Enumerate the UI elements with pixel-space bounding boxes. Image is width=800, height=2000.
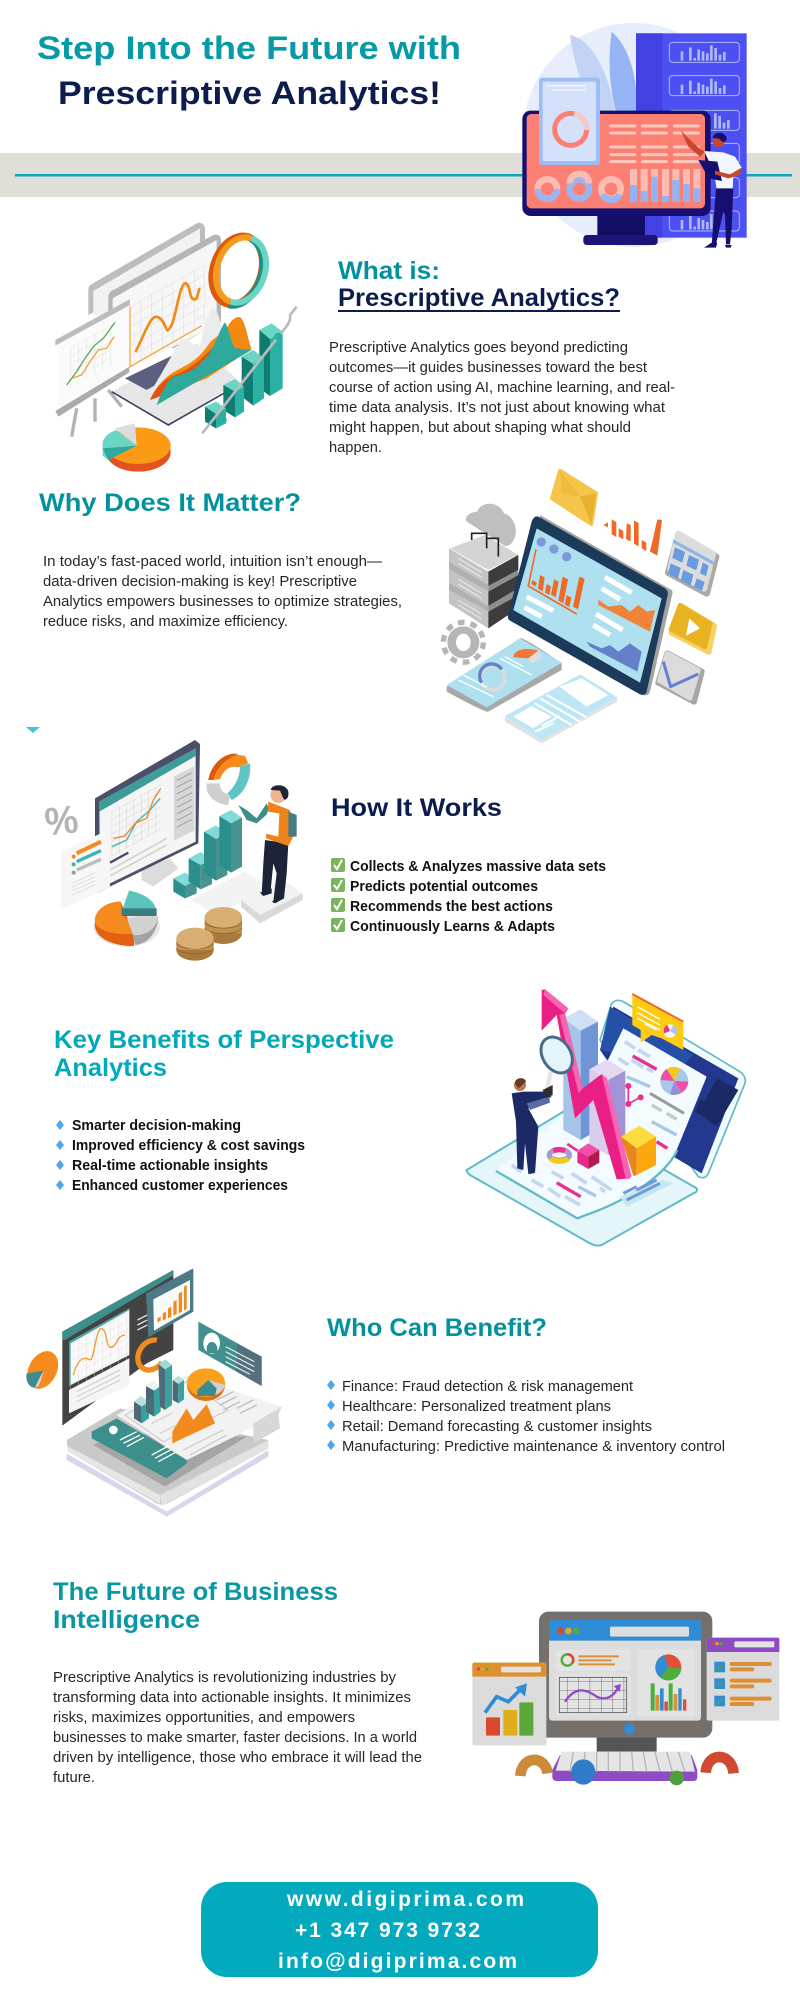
server stack xyxy=(449,535,518,628)
monitor xyxy=(539,1612,712,1738)
text block: definition: Prescriptive Analytics goes beyond predicting xyxy=(329,339,628,356)
text block: definition: outcomes—it guides businesses toward the best xyxy=(329,359,648,376)
stand xyxy=(597,1735,657,1752)
checklist: how it works: Recommends the best actions xyxy=(350,898,553,915)
checklist: how it works: Predicts potential outcomes xyxy=(350,878,538,895)
list: who can benefit: Retail: Demand forecasting & customer insights xyxy=(342,1418,652,1435)
text block: future: Prescriptive Analytics is revolutionizing industries by xyxy=(53,1669,396,1686)
heading: why does it matter: Why Does It Matter? xyxy=(39,489,301,517)
document card xyxy=(505,674,617,743)
cloud xyxy=(466,504,516,546)
contact box: +1 347 973 9732 xyxy=(295,1919,480,1942)
heading: what is prescriptive analytics xyxy=(338,257,620,312)
small bar window xyxy=(146,1268,193,1337)
spheres xyxy=(571,1759,684,1785)
illustration: tablet dashboard with server and app tiles xyxy=(443,471,716,743)
list: key benefits: Enhanced customer experiences xyxy=(72,1177,288,1194)
3D bars xyxy=(134,1359,184,1423)
magnifier and man xyxy=(512,1031,579,1177)
heading: key benefits xyxy=(54,1026,394,1082)
text block: why it matters: data-driven decision-making is key! Prescriptive xyxy=(43,573,357,590)
heading: future of business intelligence xyxy=(53,1578,338,1634)
lilac column xyxy=(589,1059,625,1155)
illustration: hero dashboard monitor with presenter xyxy=(522,23,747,248)
heading: what is prescriptive analytics: What is: xyxy=(338,257,440,285)
gear xyxy=(443,622,483,662)
illustration: isometric dashboard platform xyxy=(21,1268,282,1517)
monitor xyxy=(62,1270,173,1426)
calendar tile xyxy=(668,534,716,593)
man xyxy=(238,785,297,903)
contact box xyxy=(201,1882,598,1977)
list: who can benefit: Manufacturing: Predictive maintenance & inventory control xyxy=(342,1438,725,1455)
text block: why it matters: reduce risks, and maximize efficiency. xyxy=(43,613,288,630)
coins xyxy=(176,907,242,961)
arches xyxy=(520,1757,734,1776)
illustration: laptop report with magnifier man and pink arrow xyxy=(467,989,745,1246)
heading: who can benefit: Who Can Benefit? xyxy=(327,1314,547,1342)
segmented donut xyxy=(207,754,250,805)
text block: why it matters xyxy=(43,553,402,630)
list: key benefits xyxy=(56,1117,305,1194)
illustration: 3D desktop computer with windows xyxy=(472,1612,779,1785)
left window xyxy=(472,1663,546,1745)
title: Step Into the Future with xyxy=(37,30,461,66)
list: key benefits: Real-time actionable insights xyxy=(72,1157,268,1174)
teal card xyxy=(92,1418,187,1478)
platform xyxy=(241,880,303,923)
text block: future: transforming data into actionable insights. It minimizes xyxy=(53,1689,411,1706)
presenter xyxy=(681,130,742,248)
tablet xyxy=(508,515,672,695)
side card xyxy=(61,830,110,910)
yellow block xyxy=(621,1126,656,1176)
left pie xyxy=(21,1346,64,1394)
pie chart xyxy=(93,891,160,947)
small donut xyxy=(549,1150,569,1161)
text block: definition: might happen, but about shaping what should xyxy=(329,419,631,436)
text block: future: businesses to make smarter, faster decisions. In a world xyxy=(53,1729,417,1746)
heading: future of business intelligence: Intelligence xyxy=(53,1606,200,1634)
checklist: how it works: Collects & Analyzes massive data sets xyxy=(350,858,606,875)
list: key benefits: Improved efficiency & cost savings xyxy=(72,1137,305,1154)
right pie xyxy=(187,1368,225,1401)
envelope xyxy=(552,471,596,524)
teal bars xyxy=(173,810,242,898)
title xyxy=(37,30,461,111)
speech card xyxy=(632,994,683,1050)
light blue column xyxy=(563,1009,598,1140)
illustration: analytics presentation boards and laptop xyxy=(55,223,297,472)
orange donut xyxy=(132,1335,171,1375)
text block: why it matters: Analytics empowers businesses to optimize strategies, xyxy=(43,593,402,610)
text block: definition: course of action using AI, machine learning, and real- xyxy=(329,379,675,396)
heading: future of business intelligence: The Future of Business xyxy=(53,1578,338,1606)
illustration: monitor analytics with man and coins: % xyxy=(43,797,80,845)
list: key benefits: Smarter decision-making xyxy=(72,1117,241,1134)
orange peaks xyxy=(172,1404,215,1443)
list: who can benefit: Healthcare: Personalized treatment plans xyxy=(342,1398,611,1415)
heading: key benefits: Key Benefits of Perspective xyxy=(54,1026,394,1054)
pink arrow xyxy=(542,989,630,1179)
text block: definition: happen. xyxy=(329,439,382,456)
checklist: how it works xyxy=(331,858,606,935)
list: who can benefit: Finance: Fraud detection & risk management xyxy=(342,1378,634,1395)
phone xyxy=(447,638,562,712)
text block: definition: time data analysis. It’s not just about knowing what xyxy=(329,399,666,416)
title: Prescriptive Analytics! xyxy=(58,75,441,111)
text block: future xyxy=(53,1669,422,1786)
text block: definition xyxy=(329,339,675,456)
contact box: www.digiprima.com xyxy=(286,1888,524,1911)
contact box: info@digiprima.com xyxy=(278,1950,517,1973)
heading: how it works: How It Works xyxy=(331,794,502,822)
check tile xyxy=(658,653,702,702)
header band xyxy=(0,153,800,197)
heading: what is prescriptive analytics: Prescriptive Analytics? xyxy=(338,284,620,312)
small teal triangle accent xyxy=(26,727,40,733)
keyboard xyxy=(552,1752,697,1781)
pie on report xyxy=(660,1067,688,1095)
text block: future: risks, maximizes opportunities, and empowers xyxy=(53,1709,355,1726)
play tile xyxy=(671,605,714,652)
right window xyxy=(707,1638,779,1721)
pink cube xyxy=(567,1143,599,1169)
text block: future: driven by intelligence, those who embrace it will lead the xyxy=(53,1749,422,1766)
heading: key benefits: Analytics xyxy=(54,1054,167,1082)
illustration: monitor analytics with man and coins xyxy=(43,740,303,961)
checklist: how it works: Continuously Learns & Adapts xyxy=(350,918,555,935)
list: who can benefit xyxy=(327,1378,725,1455)
text block: why it matters: In today’s fast-paced world, intuition isn’t enough— xyxy=(43,553,382,570)
text block: future: future. xyxy=(53,1769,95,1786)
profile card xyxy=(198,1322,262,1386)
